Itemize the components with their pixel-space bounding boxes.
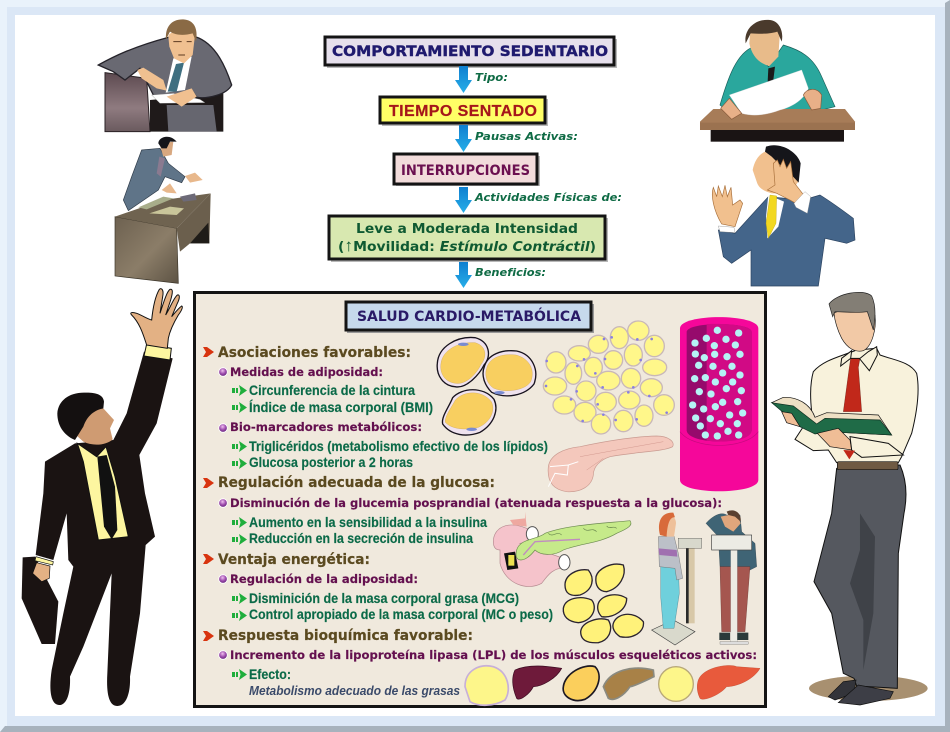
bullet list: respuesta bioquimica: [203, 628, 757, 698]
flow box: leve a moderada intensidad: Leve a Moderada Intensidad: [356, 221, 578, 237]
icon: pink blood vessel with glucose dots: [680, 317, 758, 491]
bullet list: asociaciones favorables: Asociaciones favorables:: [218, 345, 411, 361]
label: pausas activas: Pausas Activas:: [475, 130, 578, 143]
icon: businessman leaning over desk: [115, 137, 211, 283]
bullet list: ventaja energetica: Disminición de la masa corporal grasa (MCG): [249, 591, 519, 606]
bullet list: ventaja energetica: [203, 552, 553, 622]
flow box: leve a moderada intensidad: [329, 216, 608, 262]
label: beneficios: Beneficios:: [475, 266, 546, 279]
icon: man in blue suit hand to ear: [712, 145, 855, 286]
bullet list: ventaja energetica: Ventaja energética:: [218, 552, 370, 568]
icon: cluster of yellow adipocytes: [543, 321, 674, 434]
arrow: tipo: [455, 66, 472, 93]
panel heading: [346, 302, 594, 333]
flow box: interrupciones: INTERRUPCIONES: [401, 163, 530, 179]
arrow: pausas activas: [455, 125, 472, 152]
bullet list: regulacion de la glucosa: Reducción en la secreción de insulina: [249, 531, 473, 546]
panel: salud cardio-metabolica: [194, 292, 766, 706]
arrow: beneficios: [455, 262, 472, 288]
icon: man in teal shirt reading paper at table: [700, 20, 855, 142]
flow box: tiempo sentado: TIEMPO SENTADO: [389, 103, 537, 120]
flow box: comportamiento sedentario: [325, 37, 617, 68]
bullet list: asociaciones favorables: Índice de masa corporal (BMI): [249, 400, 433, 415]
bullet list: asociaciones favorables: Glucosa posterior a 2 horas: [249, 455, 413, 470]
bullet list: respuesta bioquimica: Efecto:: [249, 667, 291, 682]
icon: businessman in black suit raising arm with briefcase: [22, 289, 182, 706]
icon: man in white shirt reading green book: [772, 292, 928, 705]
bullet list: asociaciones favorables: Triglicéridos (metabolismo efectivo de los lípidos): [249, 439, 548, 454]
bullet list: asociaciones favorables: [203, 345, 548, 470]
icon row: fat cells and livers: [465, 665, 760, 705]
label: actividades fisicas: Actividades Físicas de:: [474, 191, 622, 204]
icon: duodenum and pancreas anatomy: [493, 512, 631, 587]
icon: pancreas: [548, 436, 673, 492]
bullet list: asociaciones favorables: Medidas de adiposidad:: [230, 365, 383, 379]
bullet list: ventaja energetica: Regulación de la adiposidad:: [230, 572, 418, 586]
arrow: actividades fisicas: [455, 187, 472, 213]
bullet list: respuesta bioquimica: Metabolismo adecuado de las grasas: [249, 683, 460, 698]
flow box: interrupciones: [394, 154, 540, 186]
flow box: comportamiento sedentario: COMPORTAMIENTO SEDENTARIO: [332, 44, 608, 60]
bullet list: regulacion de la glucosa: Aumento en la sensibilidad a la insulina: [249, 515, 487, 530]
bullet list: respuesta bioquimica: Incremento de la lipoproteína lipasa (LPL) de los músculos esqueléticos activos:: [230, 648, 757, 662]
icon: woman on weighing scale: [652, 513, 702, 645]
panel heading: SALUD CARDIO-METABÓLICA: [357, 307, 581, 325]
bullet list: asociaciones favorables: Circunferencia de la cintura: [249, 383, 415, 398]
icon: man on weighing scale: [706, 510, 757, 644]
bullet list: regulacion de la glucosa: Regulación adecuada de la glucosa:: [218, 475, 495, 491]
bullet list: ventaja energetica: Control apropiado de la masa corporal (MC o peso): [249, 607, 553, 622]
flow box: leve a moderada intensidad: (↑Movilidad: Estímulo Contráctil ): [338, 236, 596, 255]
label: tipo: Tipo:: [475, 71, 508, 84]
icon: three large fat cells: [437, 337, 536, 435]
flow box: tiempo sentado: [380, 97, 548, 126]
bullet list: regulacion de la glucosa: [203, 475, 722, 546]
bullet list: regulacion de la glucosa: Disminución de la glucemia posprandial (atenuada respuesta a la glucosa):: [230, 496, 722, 510]
icon: businessman seated in armchair reading: [98, 19, 232, 132]
bullet list: asociaciones favorables: Bio-marcadores metabólicos:: [230, 420, 422, 434]
icon: yellow fat cell cluster: [563, 564, 643, 643]
bullet list: respuesta bioquimica: Respuesta bioquímica favorable:: [218, 628, 473, 644]
